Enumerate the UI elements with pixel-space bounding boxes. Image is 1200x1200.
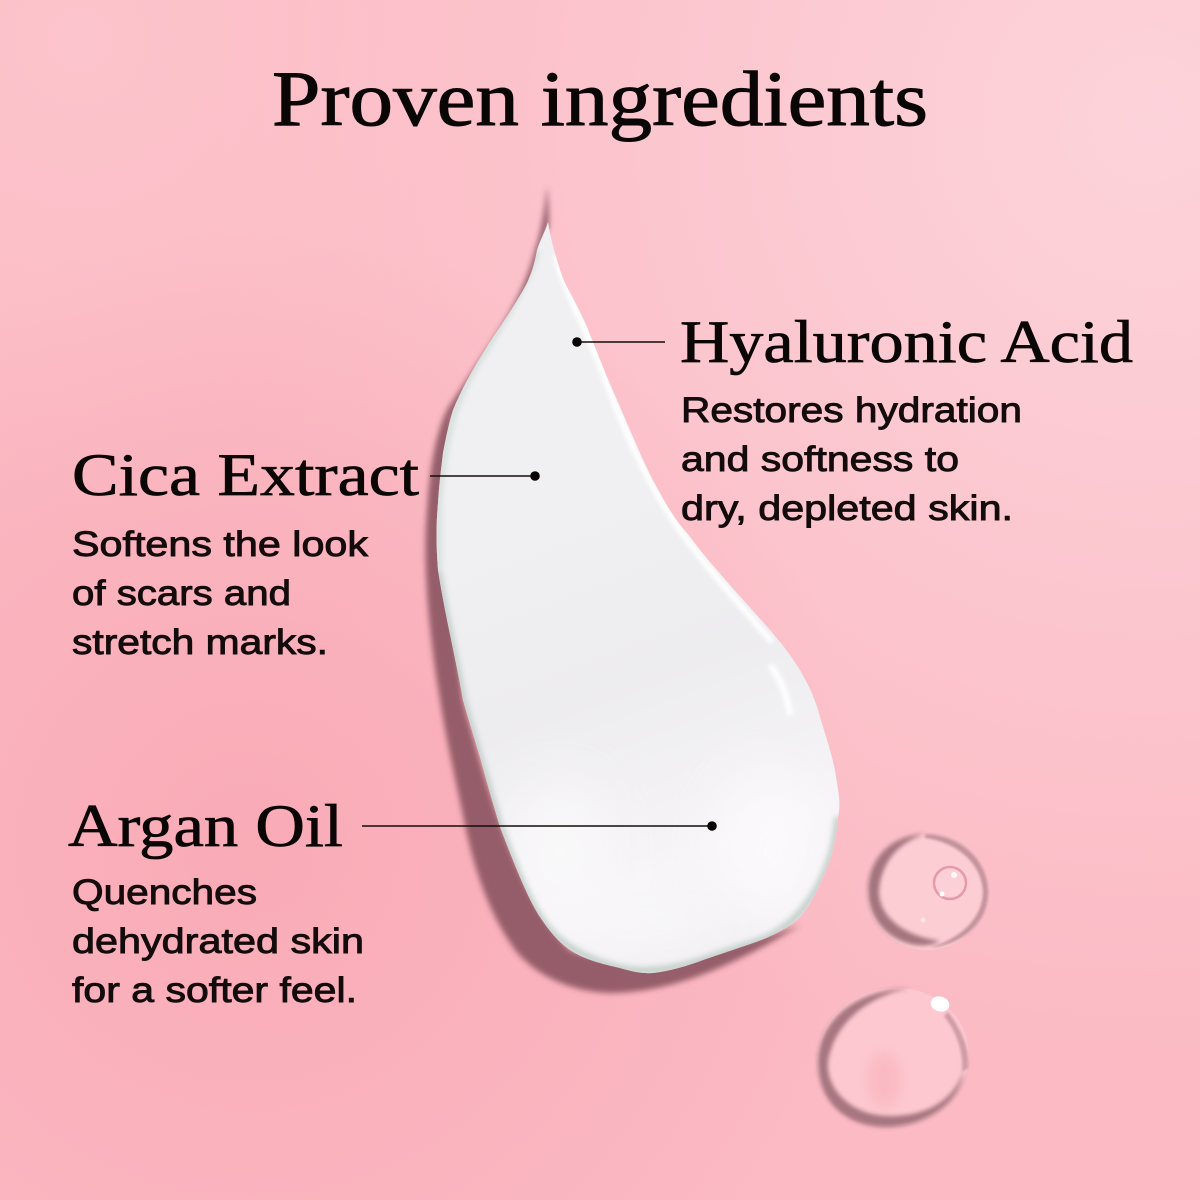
leader line and dot: [572, 337, 665, 347]
description line 3: stretch marks.: [72, 623, 328, 662]
water droplet upper: [867, 834, 988, 950]
description line 2: and softness to: [681, 440, 959, 479]
description: Quenches: [72, 873, 257, 912]
leader line and dot: [430, 471, 540, 481]
description line 2: dehydrated skin: [72, 922, 364, 961]
shadow under cream: [425, 186, 800, 993]
description line 3: dry, depleted skin.: [681, 489, 1013, 528]
ingredient name: Hyaluronic Acid: [680, 309, 1133, 375]
leader line and dot: [362, 821, 717, 831]
description line 3: for a softer feel.: [72, 971, 357, 1010]
description: Restores hydration: [681, 391, 1022, 430]
water droplet lower: [806, 976, 980, 1138]
ingredient name: Cica Extract: [72, 442, 419, 508]
title: Proven ingredients: [272, 55, 928, 142]
cream swatch illustration: [425, 186, 839, 993]
cream shading and gloss: [438, 250, 838, 971]
callout: Hyaluronic Acid: [572, 309, 1133, 430]
description: Softens the look: [72, 525, 369, 564]
description line 2: of scars and: [72, 574, 291, 613]
cream body: [436, 222, 839, 973]
ingredient name: Argan Oil: [68, 793, 343, 859]
callout: Cica Extract: [72, 442, 540, 564]
callout: Argan Oil: [68, 793, 717, 912]
